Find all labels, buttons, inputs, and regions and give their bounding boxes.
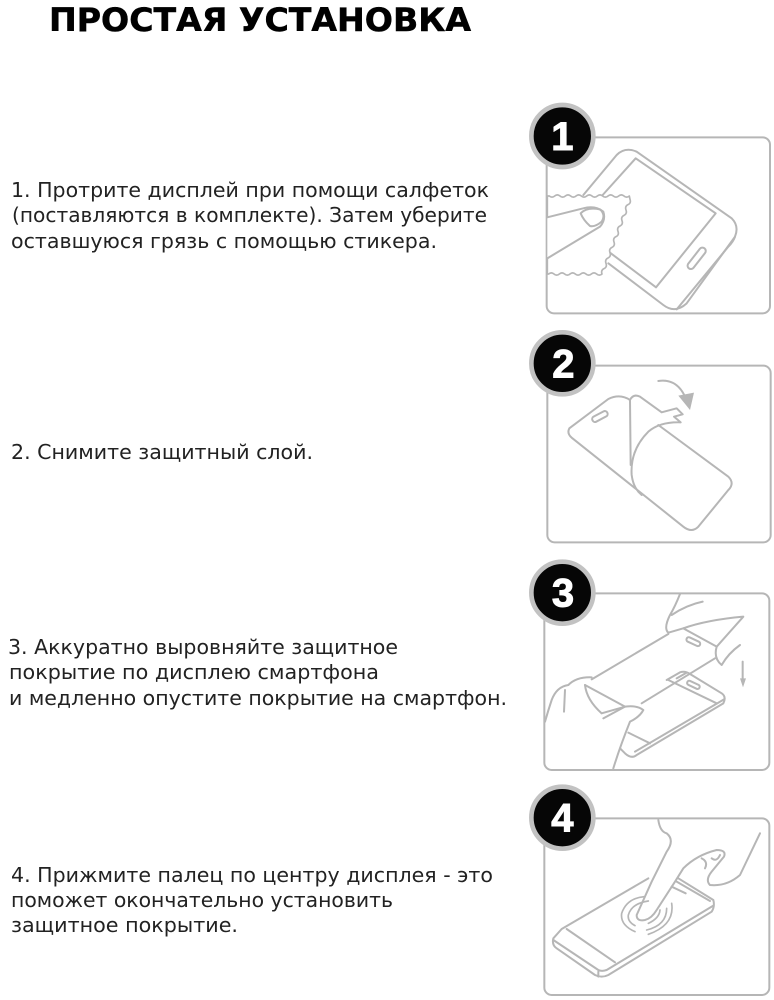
icon: peel arrow xyxy=(658,381,694,410)
icon: pressing hand xyxy=(637,820,760,920)
text: step 3: и медленно опустите покрытие на смартфон. xyxy=(9,686,507,710)
text: step 2: 2. Снимите защитный слой. xyxy=(11,440,313,464)
icon: pressure ripples xyxy=(621,897,672,934)
panel: step 2 illustration xyxy=(531,332,771,542)
icon: phone xyxy=(553,878,714,977)
icon: finger xyxy=(547,207,604,258)
badge: number 2 xyxy=(531,332,593,394)
badge: number 3 xyxy=(531,562,593,624)
badge: number 2: 2 xyxy=(552,342,574,386)
icon: phone film xyxy=(568,396,732,530)
badge: number 1 xyxy=(531,105,593,167)
icon: down arrow xyxy=(740,662,746,687)
text: step 1: (поставляются в комплекте). Затем уберите xyxy=(12,203,487,227)
text: step 3: 3. Аккуратно выровняйте защитное xyxy=(8,635,398,659)
text: step 4: поможет окончательно установить xyxy=(11,888,393,912)
panel: step 1 illustration xyxy=(531,105,770,313)
icon: lower hand xyxy=(545,677,643,768)
icon: upper hand xyxy=(666,594,743,665)
text: step 1: 1. Протрите дисплей при помощи салфеток xyxy=(11,178,489,202)
text: step 4: 4. Прижмите палец по центру дисплея - это xyxy=(11,863,493,887)
icon: wiping cloth xyxy=(547,195,630,275)
panel: step 3 illustration xyxy=(531,562,769,770)
text: step 4 xyxy=(11,863,493,937)
badge: number 4 xyxy=(531,787,593,849)
icon: protective film xyxy=(585,628,717,718)
badge: number 1: 1 xyxy=(551,115,573,159)
badge: number 4: 4 xyxy=(551,797,574,841)
badge: number 3: 3 xyxy=(552,572,574,616)
text: step 3 xyxy=(8,635,507,710)
text: step 1 xyxy=(11,178,489,253)
text: step 4: защитное покрытие. xyxy=(11,913,238,937)
text: step 1: оставшуюся грязь с помощью стикера. xyxy=(11,229,437,253)
title: ПРОСТАЯ УСТАНОВКА xyxy=(49,1,471,39)
panel: step 4 illustration xyxy=(531,787,769,995)
icon: phone below xyxy=(620,672,725,757)
text: step 3: покрытие по дисплею смартфона xyxy=(9,660,379,684)
icon: phone being wiped xyxy=(583,150,737,309)
